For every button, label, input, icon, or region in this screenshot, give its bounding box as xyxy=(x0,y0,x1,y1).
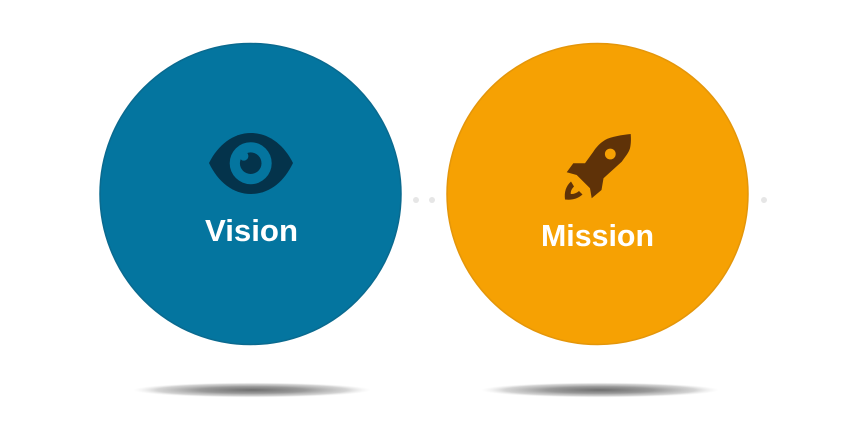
panel: vision xyxy=(100,44,401,344)
panel: mission xyxy=(447,44,748,344)
vision circle xyxy=(100,44,401,344)
vision label: Vision xyxy=(205,213,298,248)
icon: rocket xyxy=(565,134,631,200)
connector dots xyxy=(413,197,767,203)
shadow: mission xyxy=(481,382,719,398)
icon: eye xyxy=(209,133,293,194)
mission circle xyxy=(447,44,748,344)
shadow: vision xyxy=(133,382,371,398)
mission label: Mission xyxy=(541,218,654,253)
